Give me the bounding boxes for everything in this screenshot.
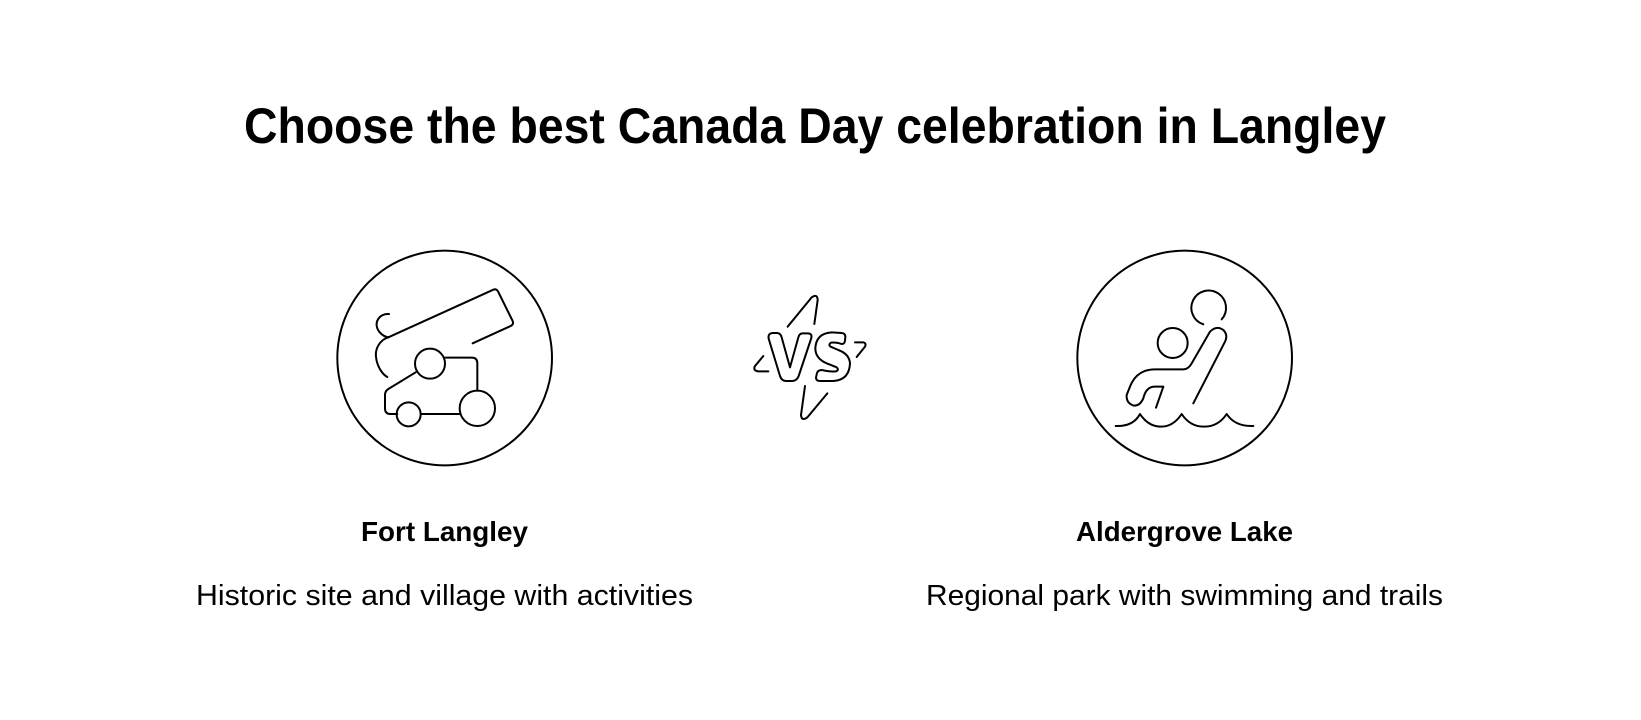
description: Fort Langley: Historic site and village with activities	[196, 580, 693, 612]
panel: Aldergrove Lake	[926, 251, 1443, 612]
description: Aldergrove Lake: Regional park with swimming and trails	[926, 580, 1443, 612]
title: Choose the best Canada Day celebration in Langley	[244, 98, 1386, 154]
icon: swimmer in circle	[1077, 251, 1292, 465]
heading: Fort Langley: Fort Langley	[361, 516, 528, 547]
panel: Fort Langley	[196, 251, 693, 612]
icon: cannon in circle	[337, 251, 552, 465]
icon: VS lightning	[754, 296, 866, 419]
heading: Aldergrove Lake: Aldergrove Lake	[1076, 516, 1293, 547]
